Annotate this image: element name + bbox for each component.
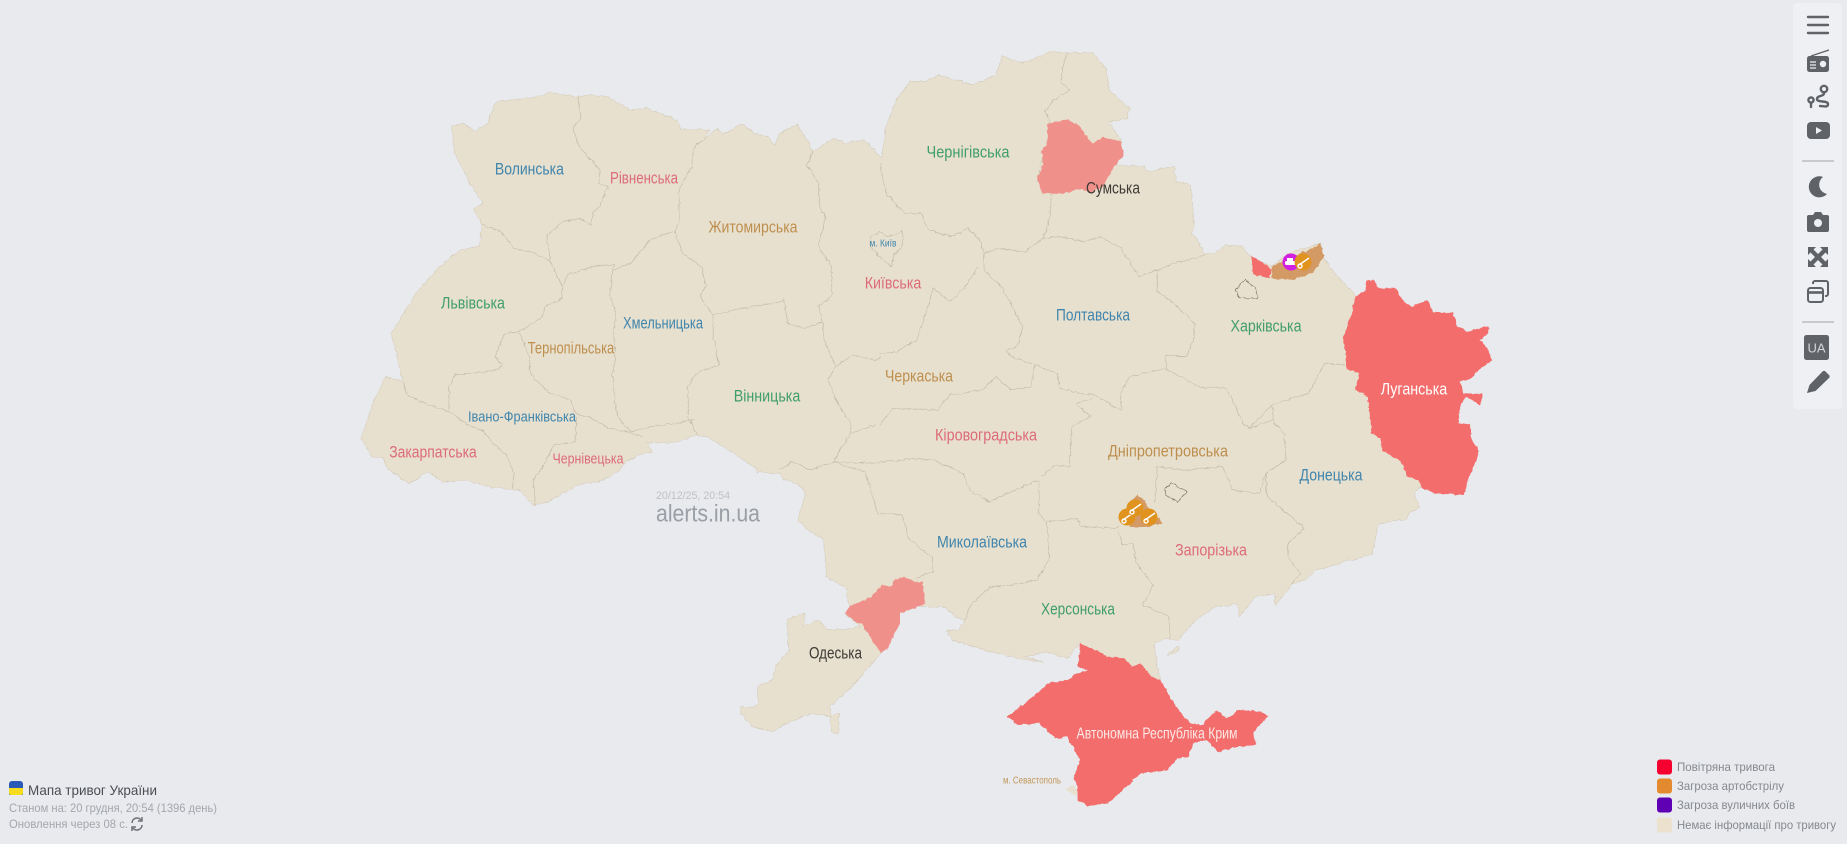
region labels: Херсонська (1041, 600, 1115, 618)
region labels (389, 142, 1448, 786)
region labels: Івано-Франківська (468, 408, 577, 426)
region labels: Сумська (1086, 178, 1140, 198)
region labels: Тернопільська (528, 338, 615, 358)
Sevastopol city (1065, 785, 1078, 797)
icon: artillery Zaporizhzhia 2 (1126, 500, 1144, 516)
icon: artillery Zaporizhzhia 1 (1118, 508, 1136, 526)
region labels: Чернігівська (926, 142, 1010, 162)
region labels: Львівська (441, 294, 505, 312)
alert region: Luhansk (1343, 281, 1492, 495)
region labels: Рівненська (610, 168, 678, 188)
region labels: Закарпатська (389, 442, 477, 462)
oblast boundaries west (403, 97, 903, 505)
oblast boundaries east (880, 53, 1345, 477)
region labels: Житомирська (708, 218, 798, 236)
legend item: no information: Немає інформації про тривогу (1677, 818, 1836, 832)
alert region: Odesa district (845, 577, 926, 653)
language badge: UA (1807, 340, 1826, 356)
watermark: 20/12/25, 20:54 (656, 490, 730, 502)
region labels: Луганська (1381, 380, 1448, 398)
icon: video (1807, 122, 1830, 139)
toolbar (1793, 3, 1842, 409)
status block: Оновлення через 08 с. (9, 817, 128, 831)
region labels: Черкаська (885, 366, 953, 386)
icon: Ukrainian flag (9, 781, 23, 795)
region labels: Донецька (1300, 466, 1363, 484)
legend (1657, 760, 1836, 832)
watermark: alerts.in.ua (656, 500, 761, 528)
region labels: Автономна Республіка Крим (1076, 726, 1238, 742)
region labels: Хмельницька (623, 314, 703, 332)
region labels: Одеська (809, 644, 862, 662)
status block: Мапа тривог України (28, 782, 157, 798)
land base (361, 52, 1421, 733)
region labels: Миколаївська (937, 532, 1027, 552)
icon: street fighting tank (1282, 254, 1300, 270)
region labels: Вінницька (734, 386, 801, 406)
icon: radio (1807, 50, 1829, 72)
map shapes (361, 52, 1492, 806)
alert region: Kharkiv border red (1251, 257, 1272, 278)
artillery region: Kharkiv border (1272, 243, 1324, 280)
region labels: Полтавська (1056, 306, 1130, 324)
map of Ukraine (361, 52, 1492, 806)
icon: artillery Kharkiv (1294, 254, 1312, 270)
icon: windows (1808, 281, 1828, 302)
icon: pencil (1807, 371, 1830, 393)
region labels: м. Київ (870, 238, 896, 250)
region labels: Запорізька (1175, 540, 1247, 560)
region labels: Харківська (1230, 316, 1302, 336)
region labels: Кіровоградська (935, 426, 1037, 444)
status block: Станом на: 20 грудня, 20:54 (1396 день) (9, 801, 217, 815)
icon: menu (1808, 17, 1828, 33)
icon: artillery Zaporizhzhia 3 (1140, 508, 1158, 526)
icon: refresh (132, 817, 142, 831)
alert region: Sumy district (1036, 119, 1124, 193)
region labels: Київська (865, 274, 922, 292)
city outlines Kharkiv and Zaporizhzhia (1165, 279, 1258, 502)
artillery region: Zaporizhzhia (1128, 495, 1162, 527)
status block (9, 781, 217, 831)
region labels: Волинська (495, 160, 564, 178)
watermark (656, 490, 761, 528)
icon: expand (1808, 247, 1828, 267)
icon: route (1808, 86, 1828, 107)
region labels: Дніпропетровська (1108, 442, 1228, 460)
legend item: artillery threat: Загроза артобстрілу (1677, 779, 1784, 793)
oblast boundaries south (780, 458, 1304, 638)
icon: camera (1807, 212, 1829, 232)
legend item: air alert: Повітряна тривога (1677, 760, 1775, 774)
icon: moon (1809, 176, 1827, 197)
region labels: Чернівецька (552, 450, 624, 468)
region labels: м. Севастополь (1003, 776, 1061, 786)
legend item: street fighting: Загроза вуличних боїв (1677, 798, 1795, 812)
alert region: Crimea (1007, 643, 1268, 806)
language badge (1804, 335, 1829, 360)
